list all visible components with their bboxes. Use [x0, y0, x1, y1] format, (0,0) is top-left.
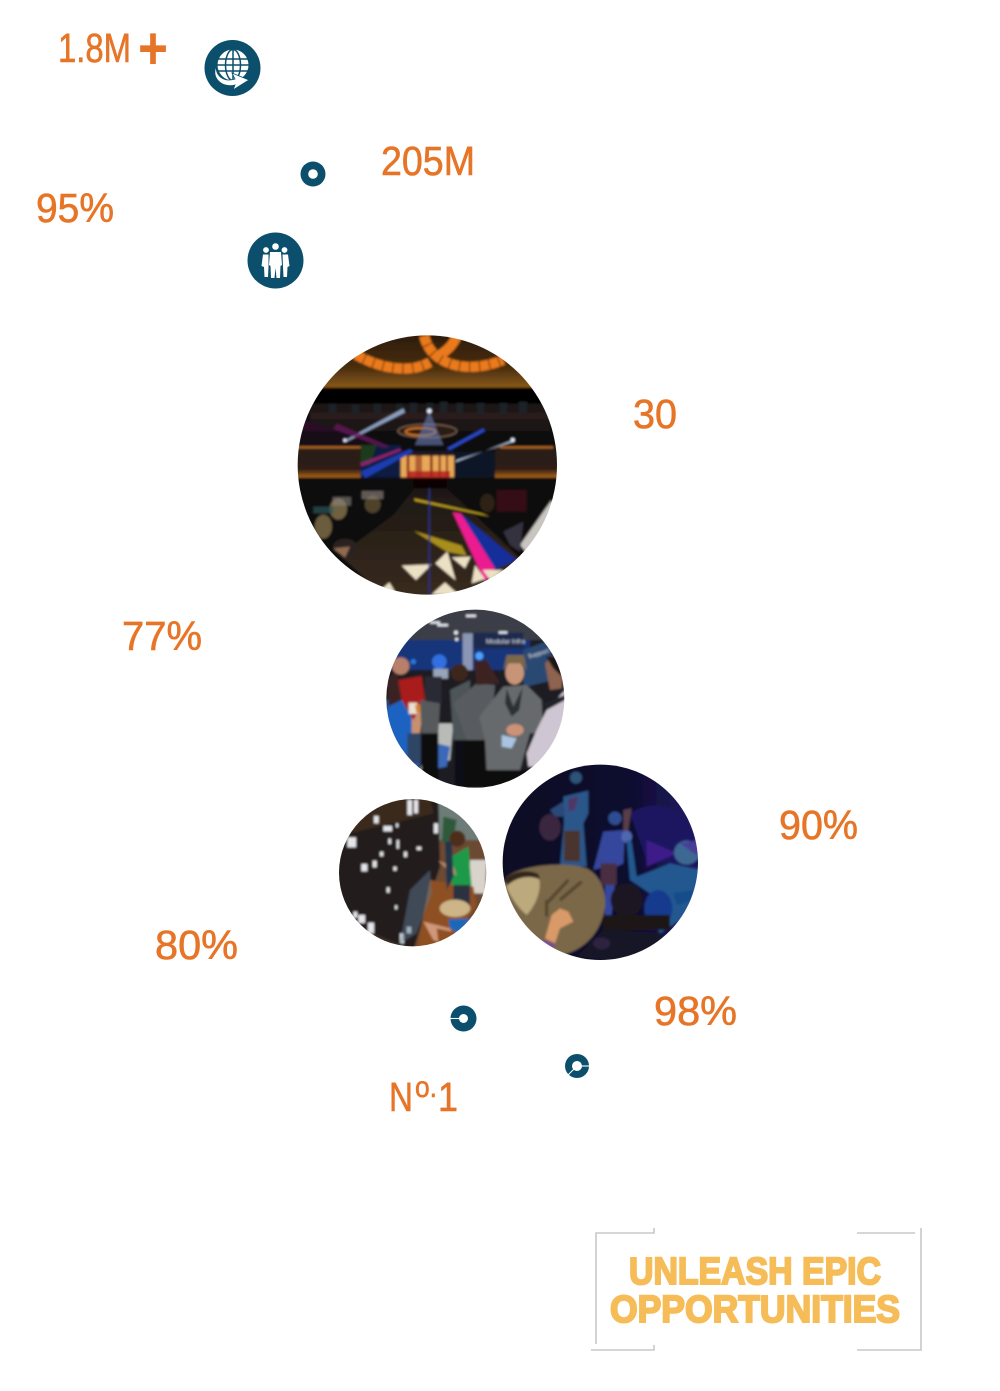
- beams: [345, 408, 405, 442]
- stat: 1.8M+: 1.8M: [58, 25, 131, 71]
- stat: 95%: 95%: [36, 185, 114, 231]
- stat: 90%: 90%: [779, 802, 858, 848]
- stat: 205M: 205M: [381, 138, 475, 184]
- grey group: [420, 700, 440, 737]
- photo: avatar exhibit: [500, 762, 703, 965]
- call to action: unleash epic opportunities: OPPORTUNITIES: [610, 1289, 900, 1331]
- icon: people group: [248, 232, 304, 288]
- audience: [298, 476, 414, 549]
- stat: 1.8M+: +: [138, 15, 168, 82]
- call to action: unleash epic opportunities: [591, 1228, 921, 1350]
- bracket frame: [591, 1228, 921, 1350]
- icon: small ring with two slits: [565, 1054, 590, 1078]
- stone: [505, 865, 605, 955]
- stat: No. 1: o.: [415, 1071, 437, 1104]
- hand: [545, 908, 573, 943]
- stat: 77%: 77%: [122, 613, 202, 659]
- stat: 1.8M+: [58, 15, 168, 82]
- stat: No. 1: [389, 1071, 458, 1120]
- photo: expo floor crowd: [383, 607, 570, 790]
- right man: [527, 690, 570, 767]
- side screens: [297, 447, 361, 478]
- ceiling arches: [355, 335, 503, 369]
- stat: No. 1: 1: [438, 1074, 458, 1120]
- stage screens: [401, 453, 454, 477]
- main woman: [479, 685, 543, 770]
- photo: interactive wall: [337, 797, 490, 950]
- background people and carpet: [425, 677, 442, 703]
- blonde child: [440, 900, 470, 917]
- photo: gala stage event: [298, 335, 557, 595]
- floor: [340, 488, 520, 602]
- photo: expo floor crowd: Support Servi: [528, 644, 564, 660]
- crouching figure: [627, 840, 700, 933]
- icon: small ring with left slit: [450, 1006, 476, 1032]
- icon: globe with arrow: [204, 40, 260, 96]
- ring truss: [398, 424, 457, 438]
- icon: small ring top: [300, 162, 326, 186]
- woman blue: [387, 700, 422, 767]
- photo: expo floor crowd: Modular Infra: [486, 638, 526, 645]
- standing figure: [570, 772, 582, 784]
- second figure: [608, 812, 622, 825]
- dark plant foreground: [611, 883, 643, 917]
- call to action: unleash epic opportunities: UNLEASH EPIC: [629, 1251, 881, 1293]
- stat: No. 1: N: [389, 1074, 413, 1120]
- stat: 30: 30: [633, 391, 677, 437]
- stat: 80%: 80%: [155, 922, 238, 968]
- floor lights: [414, 498, 490, 517]
- green shirt person: [449, 831, 465, 847]
- red man: [392, 657, 409, 675]
- stat: 98%: 98%: [654, 988, 737, 1034]
